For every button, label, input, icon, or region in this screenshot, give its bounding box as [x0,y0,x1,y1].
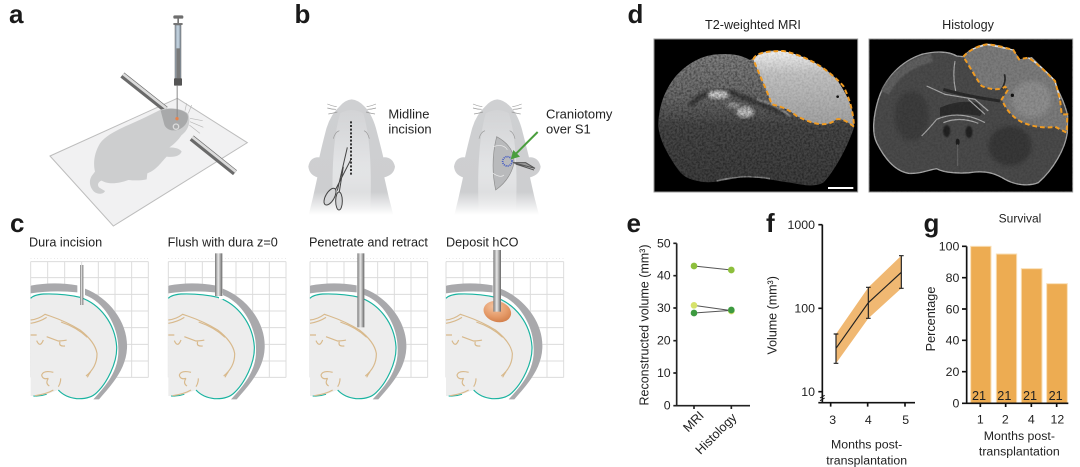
paper sheet [50,98,247,226]
mouse head: midline incision [308,99,395,217]
dotted incision line [348,121,353,176]
x axis title: Months post- [831,438,902,452]
y tick labels: 100 [794,302,815,316]
y tick labels [939,240,959,411]
panel label c: c [10,208,24,238]
x axis title: transplantation [826,453,907,467]
y tick labels: 40 [946,334,959,348]
y tick labels: 20 [657,334,671,348]
tumor outline [753,51,854,127]
x tick labels: 12 [1050,412,1064,426]
panel label g: g [924,208,939,238]
panel label e: e [626,208,641,238]
midline incision label: incision [388,122,432,137]
craniotomy label: Craniotomy [546,106,613,121]
error band [836,256,901,363]
bars [971,246,1067,403]
MRI image [654,39,858,192]
craniotomy drill site [503,157,512,166]
y tick labels: 80 [946,271,959,285]
step: flush with dura [168,236,286,399]
y tick labels: 100 [939,240,959,254]
y axis title: Reconstructed volume (mm³) [638,245,652,405]
tumor outline [963,44,1067,133]
y axis title: Percentage [924,287,938,351]
x tick labels [829,413,909,427]
exposed skull [493,137,514,190]
panel f: volume over time chart [766,218,915,467]
midline incision label: Midline [388,106,429,121]
y tick labels: 60 [946,302,959,316]
step: deposit hCO [446,236,564,399]
x tick labels: 3 [829,413,836,427]
step: penetrate and retract: Penetrate and retract [309,236,428,250]
y tick labels: 30 [657,301,671,315]
y axis title: Volume (mm³) [766,276,780,355]
panel e: reconstructed volume chart [638,236,750,457]
chart title: Survival [999,211,1041,225]
y tick labels [657,236,671,413]
panel g: survival bar chart [924,211,1068,459]
icon: forceps [513,163,535,170]
y tick labels: 0 [664,399,671,413]
step: dura incision: Dura incision [29,236,102,250]
syringe [173,15,183,118]
step: penetrate and retract [309,236,428,399]
ear bar rear [122,74,166,109]
sample counts: 21 [972,389,986,403]
sample counts: 21 [1023,389,1037,403]
panel a: stereotaxic injection [50,15,247,226]
sample counts: 21 [1049,389,1063,403]
icon: scissors [322,147,351,210]
mean line and error bars [834,256,904,363]
x tick labels: MRI [680,409,707,435]
y tick labels: 10 [657,366,671,380]
mouse head: craniotomy [454,99,541,217]
panel c: injection sequence [29,236,564,399]
MRI title: T2-weighted MRI [705,18,801,32]
x tick labels [977,412,1064,426]
x tick labels: 5 [902,413,909,427]
y tick labels: 40 [657,269,671,283]
x axis title: transplantation [979,445,1060,459]
Histology image [869,39,1073,192]
x tick labels: 1 [977,412,984,426]
sample counts: 21 [997,389,1011,403]
injection site [175,117,179,120]
craniotomy label: over S1 [546,122,591,137]
mouse silhouette [90,103,203,194]
axes [673,243,750,409]
x axis title: Months post- [984,429,1055,443]
sample counts [972,389,1063,403]
panel b: surgical exposure [308,99,613,217]
step: flush with dura: Flush with dura z=0 [168,236,278,250]
x tick labels: 4 [865,413,872,427]
step: dura incision [29,236,148,399]
y tick labels [788,218,815,399]
y tick labels: 1000 [788,218,815,232]
x tick labels: 2 [1002,412,1009,426]
axes [818,225,915,407]
scale bar [828,187,853,189]
y tick labels: 0 [952,397,959,411]
paired data points [691,263,735,316]
axes [962,246,1068,407]
panel label f: f [766,208,775,238]
panel d: imaging [654,18,1073,192]
Histology title: Histology [942,18,995,32]
step: deposit hCO: Deposit hCO [446,236,519,250]
x tick labels: 4 [1028,412,1035,426]
y tick labels: 50 [657,236,671,250]
x tick labels: Histology [693,410,740,457]
y tick labels: 20 [946,365,959,379]
ear bar front [192,137,236,173]
y tick labels: 10 [801,385,815,399]
hCO graft [481,298,514,325]
green arrow [511,132,538,159]
